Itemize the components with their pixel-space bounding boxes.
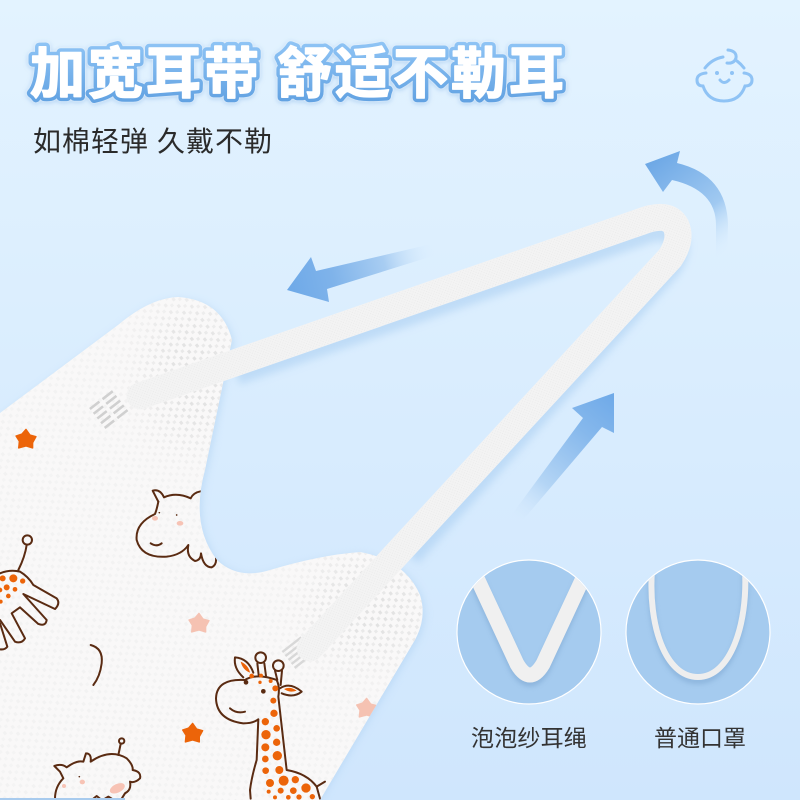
comparison: ordinary mask — [626, 560, 770, 751]
bottom edge tint — [0, 798, 125, 800]
star: pink middle — [189, 613, 209, 632]
comparison: ordinary mask: 普通口罩 — [654, 725, 746, 751]
arrow: pointing left — [287, 243, 436, 302]
title: 加宽耳带舒适不勒耳 — [30, 43, 564, 105]
ear strap stitching, lower — [282, 636, 314, 669]
star: pink edge — [357, 698, 377, 717]
hippo bottom — [54, 738, 140, 799]
giraffe left — [0, 535, 58, 649]
star: orange upper — [16, 429, 36, 448]
comparison: bubble gauze ear strap: 泡泡纱耳绳 — [471, 725, 587, 751]
arrow: pointing up-right — [510, 393, 614, 520]
subtitle: 如棉轻弹久戴不勒 — [33, 126, 272, 157]
comparison: bubble gauze ear strap — [457, 560, 601, 751]
arrow: curved up-left — [645, 151, 728, 258]
giraffe large — [216, 652, 325, 800]
title: 加宽耳带舒适不勒耳 — [30, 43, 564, 105]
star: orange lower — [183, 723, 203, 742]
ear strap stitching, upper — [89, 390, 128, 429]
hippo head — [137, 490, 216, 567]
mask body — [0, 280, 440, 800]
crescent line — [91, 645, 102, 685]
mask print: animals and stars — [0, 429, 377, 800]
ear strap loop — [140, 217, 678, 648]
icon: baby face — [697, 50, 752, 101]
